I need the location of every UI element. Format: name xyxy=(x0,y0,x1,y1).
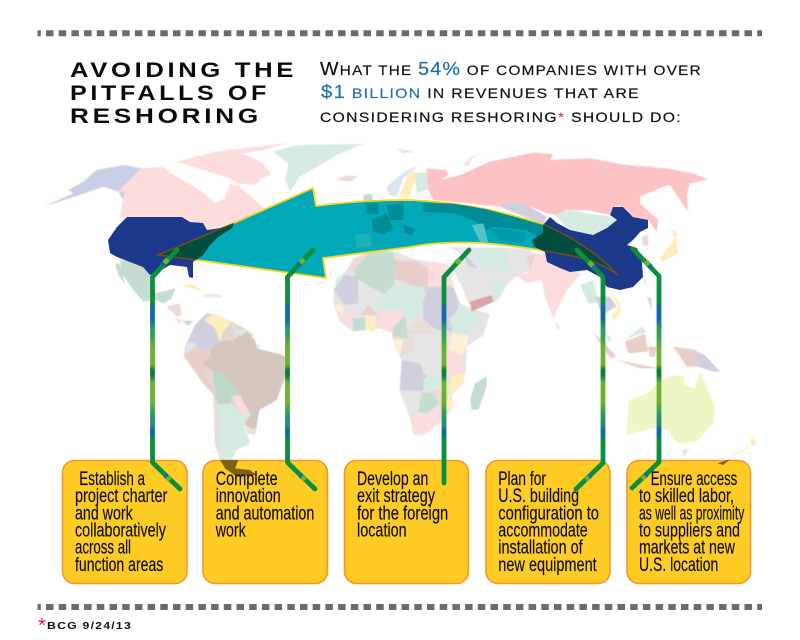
subtitle: WHAT THE 54% OF COMPANIES WITH OVER xyxy=(320,59,702,79)
title: PITFALLS OF xyxy=(70,82,270,105)
text: step 4: configuration to xyxy=(498,504,599,524)
map: Africa and Middle East xyxy=(333,248,520,435)
text: step 5: markets at new xyxy=(639,538,735,558)
title: RESHORING xyxy=(70,105,262,128)
text: step 4 xyxy=(498,469,599,576)
top dashed rule xyxy=(38,30,762,36)
source footnote: * xyxy=(38,615,46,637)
source footnote: BCG 9/24/13 xyxy=(47,621,132,632)
panel: step 4 box xyxy=(486,460,610,584)
map: Asia xyxy=(427,153,708,330)
bottom dashed rule xyxy=(38,604,762,610)
text: step 4: accommodate xyxy=(498,520,588,542)
text: step 1: function areas xyxy=(75,555,163,576)
subtitle xyxy=(320,59,702,125)
map overlap: New Zealand on box 5 xyxy=(717,459,730,465)
source footnote xyxy=(38,615,132,637)
title: AVOIDING THE xyxy=(70,59,297,82)
text: step 3: exit strategy xyxy=(357,486,435,507)
text: step 1: project charter xyxy=(75,486,168,507)
text: step 3: location xyxy=(357,520,407,542)
map: Southeast Asia and Oceania xyxy=(580,280,757,457)
text: step 2: Complete xyxy=(216,469,278,490)
map: North America xyxy=(43,143,363,230)
text: step 5 xyxy=(639,469,745,576)
connector: step 2 xyxy=(288,250,315,489)
world map xyxy=(43,143,757,460)
panel: step 5 box xyxy=(627,460,750,584)
U.S. highlighted xyxy=(108,217,234,278)
title xyxy=(70,59,297,128)
subtitle: $1 BILLION IN REVENUES THAT ARE xyxy=(321,82,640,102)
text: step 3: Develop an xyxy=(357,469,428,490)
connector lines xyxy=(152,249,659,489)
text: step 4: installation of xyxy=(498,538,583,558)
text: step 5: Ensure access xyxy=(651,469,737,490)
text: step 5: to suppliers and xyxy=(639,520,740,542)
connector: step 1 xyxy=(152,250,180,489)
text: step 3 xyxy=(357,469,448,542)
connector: step 5 xyxy=(632,249,659,488)
arrow overlap on the U.S. and China xyxy=(155,223,618,276)
text: step 1: across all xyxy=(75,538,131,558)
map: Central and South America xyxy=(115,260,291,460)
panel: step 3 box xyxy=(344,460,468,584)
text: step 1: and work xyxy=(75,504,133,524)
connector: step 4 xyxy=(576,250,603,489)
text: step 4: U.S. building xyxy=(498,486,579,507)
text: step 5: U.S. location xyxy=(639,555,718,576)
text: step 5: as well as proximity xyxy=(639,504,745,524)
text: step 2: innovation xyxy=(216,486,281,507)
map: Europe and Russia xyxy=(363,148,485,201)
text: step 1 xyxy=(75,469,168,576)
arrow: China to the U.S. xyxy=(194,186,545,279)
text: step 4: Plan for xyxy=(498,469,546,490)
text: step 3: for the foreign xyxy=(357,504,448,524)
text: step 2: work xyxy=(215,520,246,542)
text: step 1: Establish a xyxy=(79,469,145,490)
text: step 1: collaboratively xyxy=(75,520,166,542)
connector: step 3 xyxy=(444,250,469,483)
text: step 4: new equipment xyxy=(498,555,597,576)
panel: step 1 box xyxy=(62,460,187,584)
text: step 2: and automation xyxy=(216,504,314,524)
China highlighted xyxy=(532,207,648,290)
text: step 5: to skilled labor, xyxy=(639,486,734,507)
map overlap: Tierra del Fuego on box 2 xyxy=(220,460,257,477)
text: step 2 xyxy=(215,469,314,542)
panel: step 2 box xyxy=(203,460,328,584)
subtitle: CONSIDERING RESHORING * SHOULD DO: xyxy=(320,109,682,125)
